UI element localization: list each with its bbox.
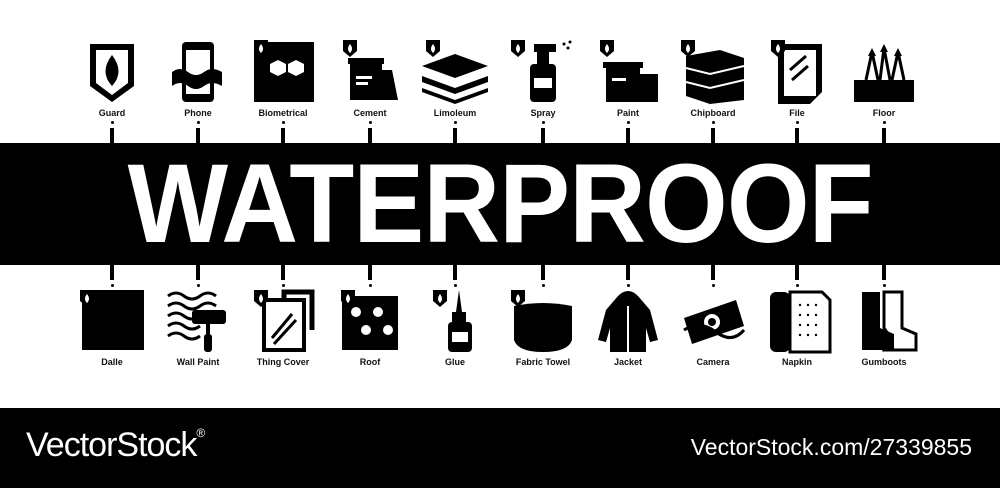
icon: spray [511,40,572,102]
icon: thing cover [254,290,312,350]
icon: roof [341,290,398,350]
icon: guard [90,44,134,102]
bottom labels: Dalle [101,357,123,367]
footer brand: VectorStock® [26,426,204,464]
text: Gumboots [862,357,906,367]
icon: gumboots [862,292,916,350]
icon: limoleum [422,40,488,104]
icon: dalle [80,290,144,350]
icon: napkin [770,292,830,352]
top labels: Guard [99,108,125,118]
icon: chipboard [681,40,744,104]
text: Phone [184,108,212,118]
icon: camera [684,300,744,344]
text: Fabric Towel [516,357,570,367]
text: Floor [873,108,895,118]
text: Cement [353,108,386,118]
icon: fabric towel [511,290,572,352]
icon: phone [172,42,222,102]
text: Spray [530,108,556,118]
text: File [789,108,805,118]
text: Roof [360,357,380,367]
text: Thing Cover [257,357,309,367]
icon: wall paint [168,293,226,352]
text: Chipboard [690,108,736,118]
icon: biometrical [254,40,314,102]
text: Glue [445,357,465,367]
text: Paint [617,108,639,118]
icon: floor [854,44,914,102]
icon: jacket [598,291,658,352]
footer bar [0,408,1000,488]
icon: cement [343,40,398,100]
icon: glue [433,290,472,352]
title text: WATERPROOF [127,141,873,266]
title band [0,143,1000,265]
text: Wall Paint [177,357,219,367]
icon: file [771,40,822,104]
footer url: VectorStock.com/27339855 [691,434,972,460]
text: Biometrical [258,108,308,118]
text: Napkin [782,357,812,367]
text: Jacket [614,357,642,367]
text: Camera [696,357,730,367]
icon: paint [600,40,658,102]
text: Limoleum [434,108,476,118]
